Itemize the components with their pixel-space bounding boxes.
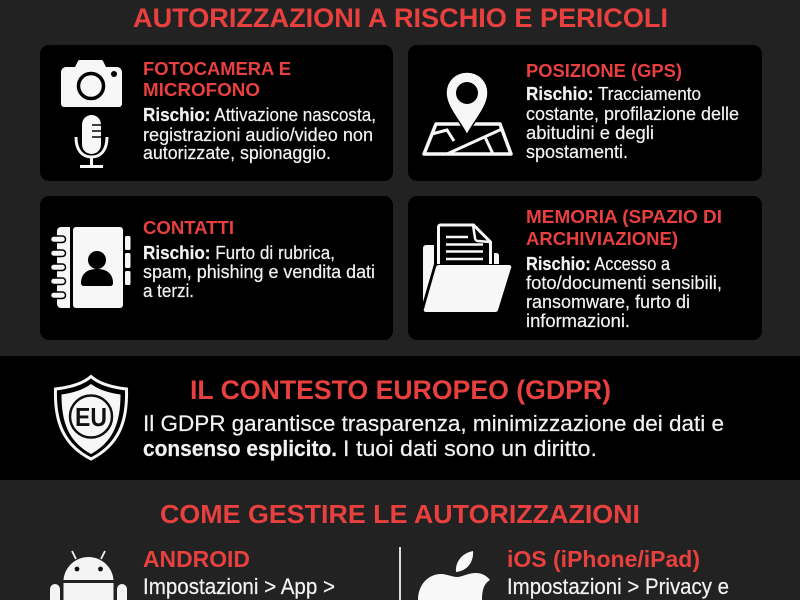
section: ios bbox=[418, 546, 729, 600]
text: rischio posizione: spostamenti. bbox=[526, 142, 628, 162]
icon: android bbox=[50, 551, 127, 600]
panel: contatti bbox=[40, 196, 393, 340]
text: rischio fotocamera bbox=[143, 105, 376, 163]
text: rischio memoria bbox=[526, 254, 722, 331]
heading: fotocamera e microfono: FOTOCAMERA E bbox=[143, 58, 291, 79]
heading: posizione: POSIZIONE (GPS) bbox=[526, 60, 682, 81]
icon: microphone bbox=[76, 115, 107, 166]
text: rischio memoria: ransomware, furto di bbox=[526, 292, 690, 312]
text: rischio contatti: Rischio: Furto di rubrica, bbox=[143, 243, 335, 263]
heading: il contesto europeo: IL CONTESTO EUROPEO (GDPR) bbox=[190, 375, 611, 405]
panel: contesto europeo gdpr bbox=[0, 356, 800, 480]
icon: address book bbox=[50, 227, 130, 308]
text: rischio memoria: informazioni. bbox=[526, 311, 630, 331]
text: rischio fotocamera: registrazioni audio/video non bbox=[143, 125, 373, 145]
heading: fotocamera e microfono: MICROFONO bbox=[143, 79, 260, 100]
icon: camera bbox=[61, 60, 122, 107]
text: rischio memoria: Rischio: Accesso a bbox=[526, 254, 671, 274]
text: rischio contatti: a terzi. bbox=[143, 281, 194, 301]
text: rischio posizione: Rischio: Tracciamento bbox=[526, 84, 701, 104]
icon: folder with document bbox=[423, 225, 511, 312]
text: ios path: Impostazioni > Privacy e bbox=[507, 574, 729, 599]
text: gdpr bbox=[143, 411, 724, 461]
text: rischio contatti: spam, phishing e vendita dati bbox=[143, 262, 375, 282]
heading: android: ANDROID bbox=[143, 546, 250, 572]
panel: posizione gps bbox=[408, 45, 762, 181]
icon: apple bbox=[418, 551, 490, 600]
heading: contatti: CONTATTI bbox=[143, 217, 234, 238]
icon: map pin bbox=[424, 72, 511, 154]
icon: eu shield: EU bbox=[75, 402, 107, 432]
text: rischio posizione: costante, profilazione delle bbox=[526, 104, 739, 124]
text: rischio posizione bbox=[526, 84, 739, 162]
text: gdpr: Il GDPR garantisce trasparenza, minimizzazione dei dati e bbox=[143, 411, 724, 436]
section: android bbox=[50, 546, 335, 600]
text: gdpr: consenso esplicito. bbox=[143, 436, 337, 461]
heading: ios: iOS (iPhone/iPad) bbox=[507, 546, 700, 572]
text: rischio fotocamera: autorizzate, spionaggio. bbox=[143, 143, 331, 163]
heading: memoria: MEMORIA (SPAZIO DI bbox=[526, 206, 722, 227]
title: AUTORIZZAZIONI A RISCHIO E PERICOLI bbox=[133, 3, 668, 33]
icon: eu shield bbox=[55, 376, 127, 459]
text: rischio contatti bbox=[143, 243, 375, 301]
heading: memoria: ARCHIVIAZIONE) bbox=[526, 228, 678, 249]
text: rischio memoria: foto/documenti sensibili, bbox=[526, 273, 722, 293]
panel: fotocamera e microfono bbox=[40, 45, 393, 181]
text: rischio fotocamera: Rischio: Attivazione nascosta, bbox=[143, 105, 376, 125]
heading: come gestire: COME GESTIRE LE AUTORIZZAZIONI bbox=[160, 499, 640, 529]
panel: memoria bbox=[408, 196, 762, 340]
text: gdpr: I tuoi dati sono un diritto. bbox=[343, 436, 597, 461]
text: android path: Impostazioni > App > bbox=[143, 574, 335, 599]
text: rischio posizione: abitudini e degli bbox=[526, 123, 654, 143]
